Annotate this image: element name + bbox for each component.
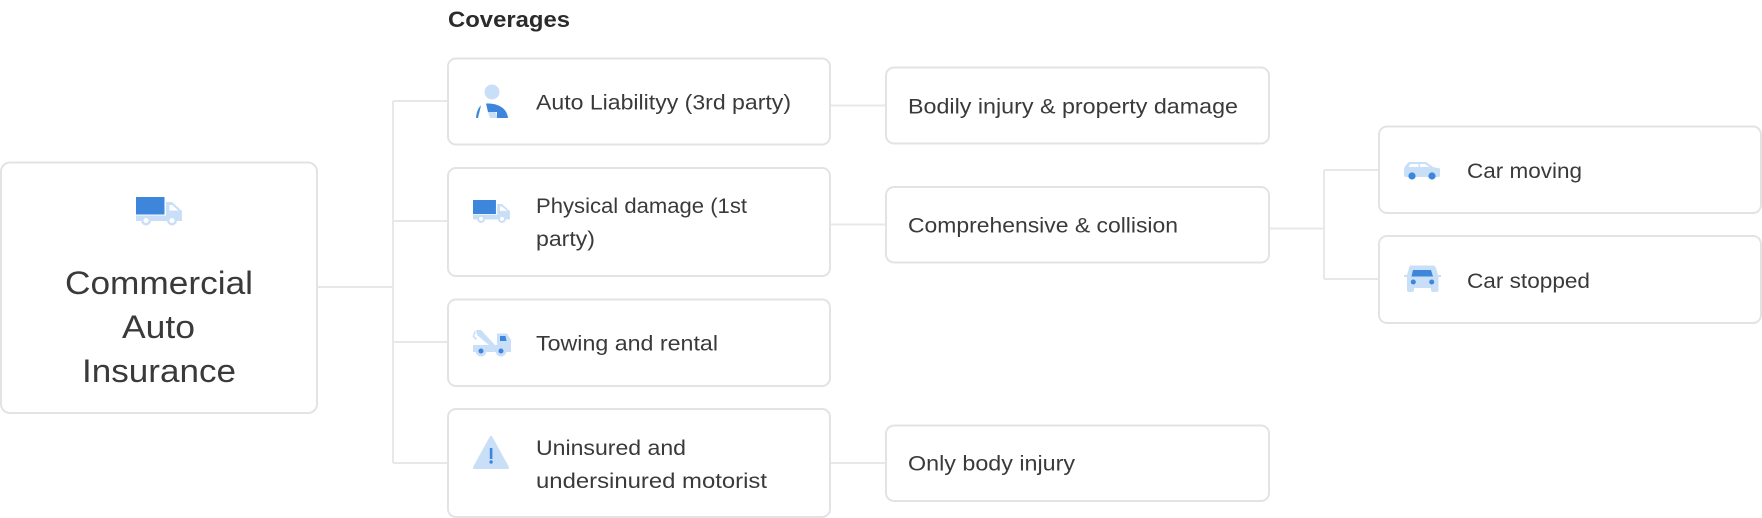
label: Car stopped <box>1467 269 1590 293</box>
icon: truck <box>136 197 182 226</box>
connector lines <box>317 101 1379 463</box>
title text <box>65 265 253 389</box>
icon: truck <box>473 200 510 223</box>
icon: tow truck <box>472 330 511 356</box>
icon: car front view <box>1404 266 1441 292</box>
label: Car moving <box>1467 159 1582 183</box>
panel: Physical damage <box>448 168 830 276</box>
label: Comprehensive & collision <box>908 214 1178 238</box>
label <box>536 436 767 493</box>
icon: car side view <box>1404 162 1440 180</box>
title text: Insurance <box>82 353 236 389</box>
label <box>536 194 747 251</box>
label: Towing and rental <box>536 332 718 356</box>
label: undersinured motorist <box>536 469 767 493</box>
panel: Auto Liability <box>448 58 830 144</box>
panel: Car moving <box>1379 126 1761 213</box>
icon: warning triangle <box>474 438 508 468</box>
panel: Car stopped <box>1379 236 1761 323</box>
label: Auto Liabilityy (3rd party) <box>536 90 791 114</box>
panel: Only body injury <box>886 426 1269 501</box>
icon: person <box>476 84 508 118</box>
label: Physical damage (1st <box>536 194 747 218</box>
panel: Towing and rental <box>448 300 830 386</box>
label: Only body injury <box>908 452 1075 476</box>
label: Bodily injury & property damage <box>908 94 1238 118</box>
panel: Bodily injury <box>886 68 1269 144</box>
title text: Auto <box>122 309 195 345</box>
panel: Commercial Auto Insurance <box>1 162 317 413</box>
label: Uninsured and <box>536 436 686 460</box>
panel: Uninsured motorist <box>448 409 830 517</box>
title text: Commercial <box>65 265 253 301</box>
heading: Coverages: Coverages <box>448 7 570 32</box>
label: party) <box>536 227 595 251</box>
panel: Comprehensive and collision <box>886 187 1269 262</box>
